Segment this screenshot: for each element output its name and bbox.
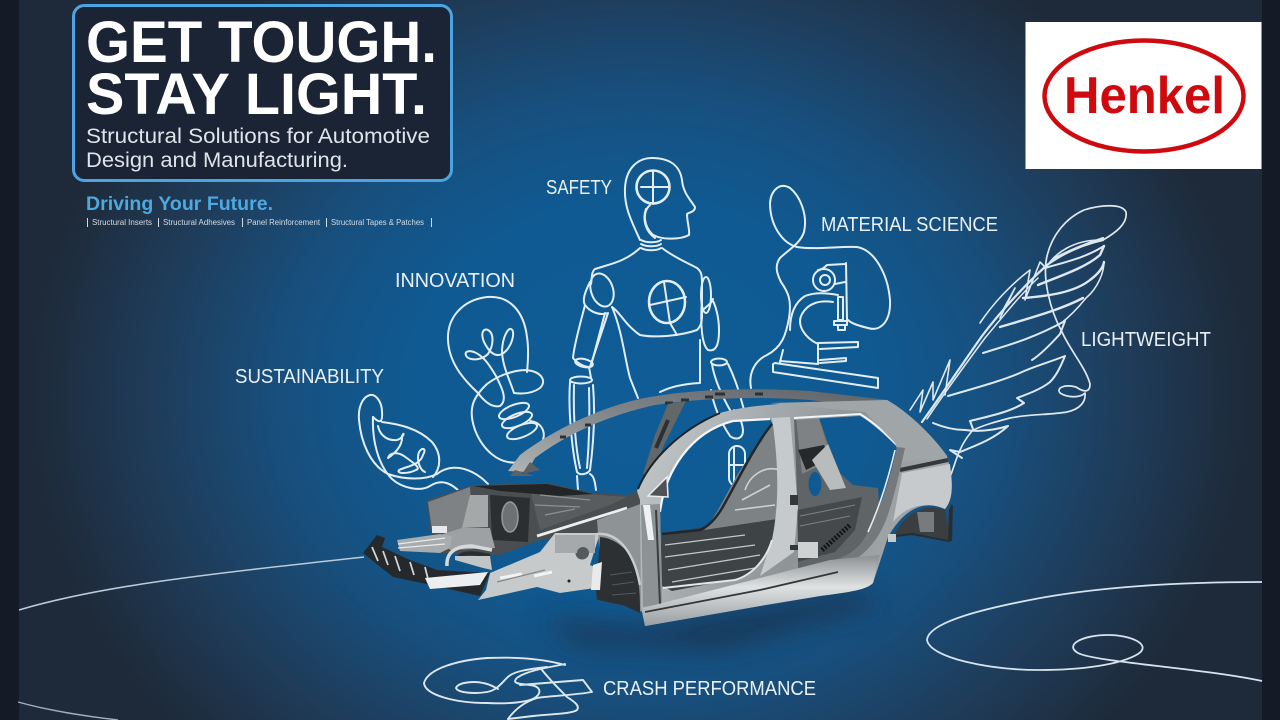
bulb base coils xyxy=(497,399,531,423)
dummy head xyxy=(625,158,695,240)
far side roof rail xyxy=(508,389,888,472)
label: material science: MATERIAL SCIENCE xyxy=(821,214,998,236)
panel frame xyxy=(74,6,452,180)
product list: Structural Adhesives xyxy=(163,218,235,227)
label: sustainability: SUSTAINABILITY xyxy=(235,366,384,388)
label: innovation: INNOVATION xyxy=(395,270,515,292)
headline line one: GET TOUGH. xyxy=(86,10,437,75)
body side frame xyxy=(637,400,952,626)
far side pillar brace xyxy=(643,401,686,474)
far side inner wall xyxy=(704,425,784,530)
bulb filament xyxy=(466,329,514,406)
icon: light bulb xyxy=(448,297,544,463)
title panel xyxy=(74,6,452,180)
label: lightweight: LIGHTWEIGHT xyxy=(1081,329,1211,351)
floor loop line right xyxy=(927,582,1262,681)
mirror triangle xyxy=(648,477,668,497)
rocker sill xyxy=(643,555,880,626)
rear door frame xyxy=(830,447,905,565)
product list xyxy=(88,218,432,227)
feather loop line xyxy=(950,206,1126,477)
icon: feather xyxy=(910,206,1126,477)
subtitle line two: Design and Manufacturing. xyxy=(86,149,348,172)
bulb neck loop xyxy=(472,370,543,463)
product list: Structural Inserts xyxy=(92,218,152,227)
dummy shoulders and torso xyxy=(591,248,702,317)
hinge pillar xyxy=(641,504,662,607)
dummy left arm xyxy=(586,270,618,310)
engine bay xyxy=(427,483,642,555)
rear interior xyxy=(792,415,880,572)
bulb glass xyxy=(448,297,528,393)
icon: leaf xyxy=(359,395,488,492)
label: safety: SAFETY xyxy=(546,177,612,199)
subtitle line one: Structural Solutions for Automotive xyxy=(86,125,430,148)
Henkel logo xyxy=(1026,22,1262,169)
icon: microscope xyxy=(750,186,890,388)
headline line two: STAY LIGHT. xyxy=(86,62,427,127)
tagline: Driving Your Future. xyxy=(86,194,273,215)
car body structure xyxy=(363,389,952,626)
product list: Structural Tapes & Patches xyxy=(331,218,424,227)
front rail xyxy=(478,533,600,600)
floor sweep line lower left xyxy=(18,702,118,720)
product list: Panel Reinforcement xyxy=(247,218,321,227)
floor sweep line left xyxy=(19,557,364,610)
icon: crash test dummy xyxy=(569,158,745,490)
car shadow xyxy=(540,590,880,650)
dummy neck xyxy=(641,240,661,250)
floor pan xyxy=(660,516,782,594)
window frame highlight xyxy=(660,419,770,512)
Henkel logo: Henkel xyxy=(1064,67,1225,125)
rear wheel arch xyxy=(894,508,950,540)
front wheel house xyxy=(597,503,643,612)
quarter panel seam xyxy=(900,460,948,470)
icon: crash squiggle xyxy=(424,658,592,719)
feather shaft xyxy=(922,240,1103,422)
feather barbs xyxy=(1000,298,1083,327)
roof top panel xyxy=(770,400,947,462)
feather edge zigzag xyxy=(910,240,1100,412)
dummy right arm xyxy=(701,277,711,313)
front bumper xyxy=(363,535,490,596)
label: crash performance: CRASH PERFORMANCE xyxy=(603,678,816,700)
B pillar xyxy=(760,417,798,576)
hood rails xyxy=(397,534,452,553)
